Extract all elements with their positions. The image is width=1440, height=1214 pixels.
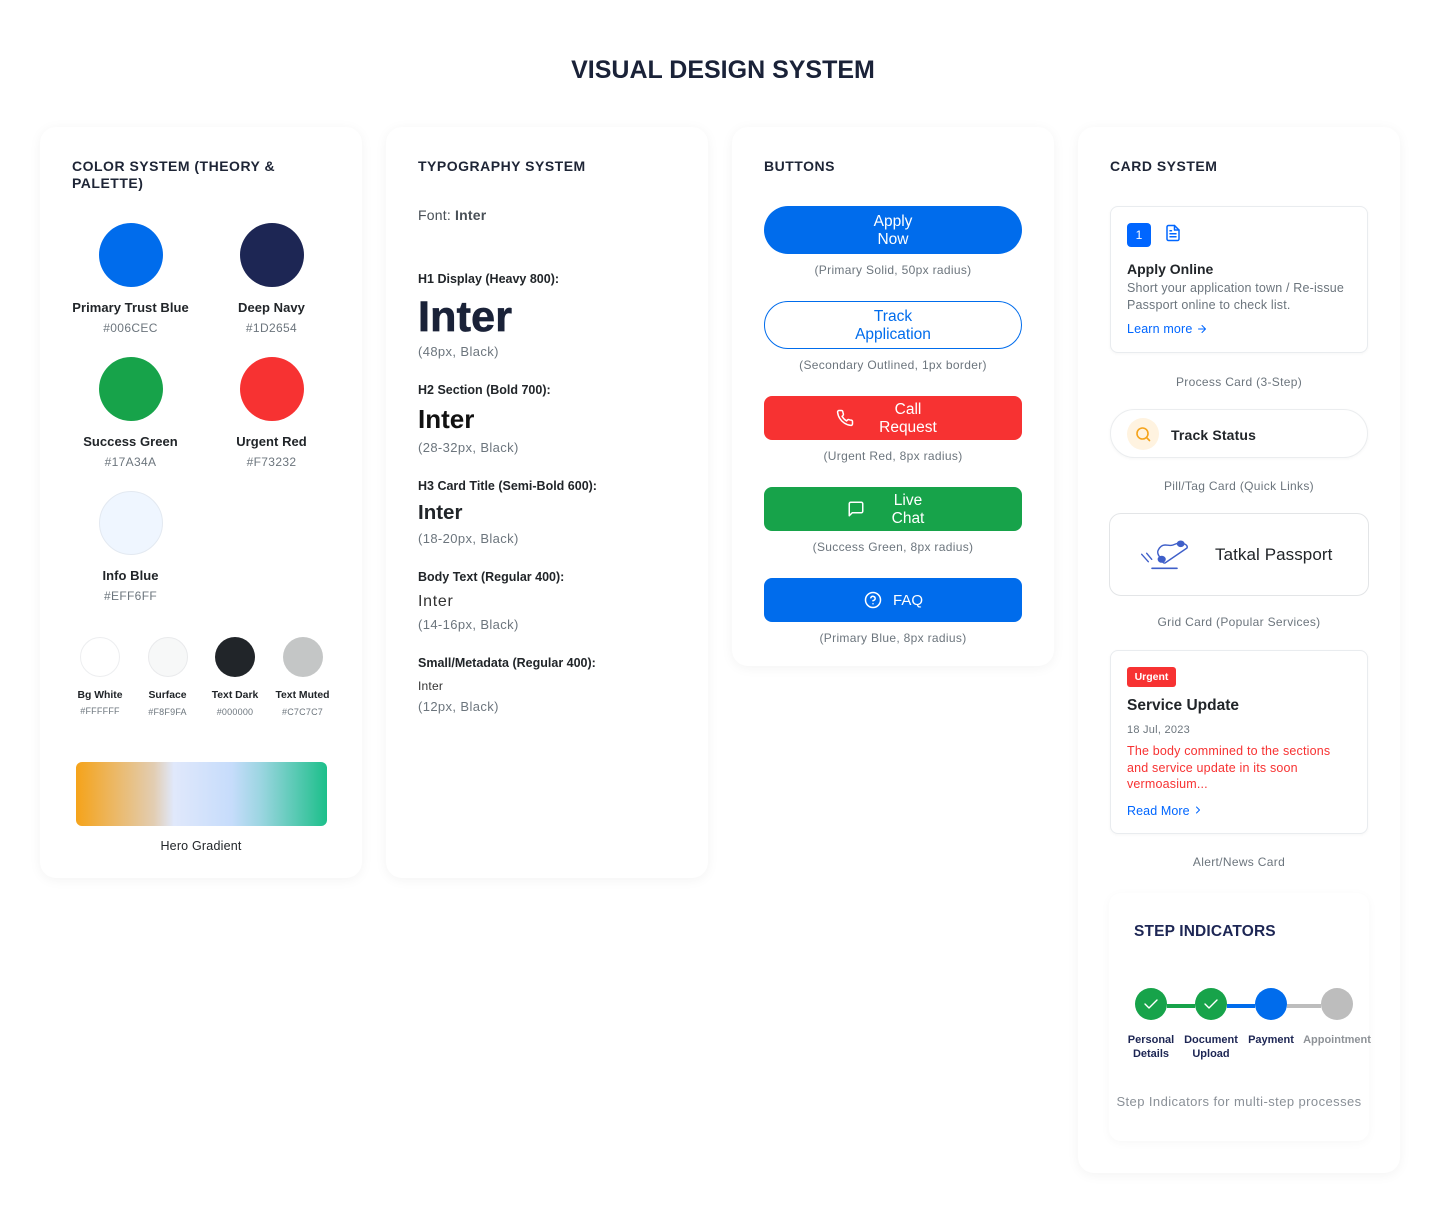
panel: typography system bbox=[386, 127, 708, 878]
card description: Short your application town / Re-issue bbox=[1127, 281, 1344, 295]
pill label: Track Status bbox=[1171, 427, 1256, 443]
swatch: bg white bbox=[77, 637, 123, 716]
swatch: bg white: #FFFFFF bbox=[80, 706, 120, 716]
caption: grid card: Grid Card (Popular Services) bbox=[1157, 615, 1320, 629]
sample: body text bbox=[418, 570, 564, 632]
swatch: surface: Surface bbox=[148, 690, 187, 701]
sample: small metadata bbox=[418, 656, 596, 714]
swatch: info blue: Info Blue bbox=[102, 568, 159, 583]
card description: Passport online to check list. bbox=[1127, 298, 1291, 312]
swatch: text muted: #C7C7C7 bbox=[282, 707, 323, 717]
sample: small metadata: (12px, Black) bbox=[418, 699, 499, 714]
step label: payment: Payment bbox=[1248, 1034, 1294, 1046]
button: live chat: Live bbox=[894, 492, 922, 509]
button: track application: Track bbox=[874, 308, 912, 325]
button: apply now: Now bbox=[877, 230, 908, 248]
step label: personal details: Personal bbox=[1128, 1034, 1174, 1046]
swatch: surface: #F8F9FA bbox=[148, 707, 187, 717]
sample: h3 card title bbox=[418, 479, 597, 546]
button: apply now: Apply bbox=[874, 213, 912, 230]
sample: body text: (14-16px, Black) bbox=[418, 617, 519, 632]
sample: h2 section: Inter bbox=[418, 404, 474, 434]
panel: color system bbox=[40, 127, 362, 878]
link: read more: Read More bbox=[1127, 804, 1190, 818]
pill card bbox=[1110, 409, 1368, 458]
panel: buttons bbox=[732, 127, 1054, 666]
swatch: deep navy bbox=[238, 223, 305, 335]
button: faq: FAQ bbox=[893, 592, 923, 609]
alert body: and service update in its soon bbox=[1127, 760, 1298, 774]
swatch: info blue: #EFF6FF bbox=[104, 589, 157, 603]
panel: card system bbox=[1078, 127, 1400, 1173]
step badge: 1 bbox=[1136, 228, 1142, 242]
heading: typography system: TYPOGRAPHY SYSTEM bbox=[418, 158, 586, 174]
card description bbox=[1127, 281, 1344, 312]
swatch: urgent red: #F73232 bbox=[247, 455, 296, 469]
sample: h2 section: H2 Section (Bold 700): bbox=[418, 383, 551, 397]
sample: h1 display: Inter bbox=[418, 293, 512, 341]
caption: process card: Process Card (3-Step) bbox=[1176, 375, 1302, 389]
grid card bbox=[1109, 513, 1369, 596]
heading: color system: PALETTE) bbox=[72, 175, 143, 191]
button: call request: Call bbox=[895, 401, 921, 418]
swatch: deep navy: Deep Navy bbox=[238, 300, 305, 315]
sample: h2 section bbox=[418, 383, 551, 455]
swatch: success green: Success Green bbox=[83, 434, 178, 449]
step 2 circle bbox=[1195, 988, 1227, 1020]
swatch: primary trust blue: #006CEC bbox=[103, 321, 158, 335]
icon: chevron bbox=[1196, 806, 1200, 814]
sample: body text: Inter bbox=[418, 593, 454, 610]
swatch: text muted bbox=[275, 637, 330, 717]
step label: personal details: Details bbox=[1133, 1048, 1169, 1060]
sample: h1 display bbox=[418, 272, 559, 359]
badge: urgent: Urgent bbox=[1135, 671, 1168, 683]
swatch: text dark: #000000 bbox=[217, 707, 253, 717]
icon: document bbox=[1166, 224, 1180, 242]
icon: question circle bbox=[864, 592, 882, 608]
step label: appointment: Appointment bbox=[1303, 1034, 1371, 1046]
step label: document upload: Document bbox=[1184, 1034, 1238, 1046]
button: call request: Request bbox=[879, 419, 937, 436]
caption: urgent red: (Urgent Red, 8px radius) bbox=[823, 449, 963, 463]
icon: service illustration bbox=[1141, 540, 1188, 570]
heading: color system bbox=[72, 158, 275, 191]
title: VISUAL DESIGN SYSTEM bbox=[571, 56, 875, 84]
sample: small metadata: Inter bbox=[418, 679, 443, 693]
swatch: urgent red bbox=[236, 357, 307, 469]
sample: h3 card title: Inter bbox=[418, 501, 462, 524]
swatch: bg white: Bg White bbox=[77, 690, 123, 701]
step label: document upload: Upload bbox=[1192, 1048, 1230, 1060]
caption: primary blue: (Primary Blue, 8px radius) bbox=[819, 631, 967, 645]
card title: Apply Online bbox=[1127, 261, 1213, 277]
alert body: The body commined to the sections bbox=[1127, 744, 1330, 758]
step 1 circle bbox=[1135, 988, 1167, 1020]
sample: h2 section: (28-32px, Black) bbox=[418, 440, 519, 455]
step badge bbox=[1127, 223, 1151, 247]
connector: green bbox=[1167, 1004, 1195, 1008]
grid card label: Tatkal Passport bbox=[1215, 545, 1332, 564]
caption: secondary outlined: (Secondary Outlined, 1px border) bbox=[799, 358, 987, 372]
swatch: success green bbox=[83, 357, 178, 469]
heading: card system: CARD SYSTEM bbox=[1110, 158, 1217, 174]
alert date: 18 Jul, 2023 bbox=[1127, 724, 1190, 736]
connector: blue bbox=[1227, 1004, 1255, 1008]
connector: grey bbox=[1287, 1004, 1321, 1008]
icon: search in orange circle bbox=[1127, 418, 1159, 450]
button: live chat: Chat bbox=[892, 510, 924, 527]
icon: arrow bbox=[1198, 325, 1206, 333]
sample: h3 card title: (18-20px, Black) bbox=[418, 531, 519, 546]
alert title: Service Update bbox=[1127, 697, 1239, 714]
step label: document upload bbox=[1184, 1034, 1238, 1060]
swatch: info blue bbox=[99, 491, 163, 603]
swatch: surface bbox=[148, 637, 188, 717]
alert body: vermoasium... bbox=[1127, 777, 1208, 791]
hero gradient bar bbox=[76, 762, 326, 826]
swatch: deep navy: #1D2654 bbox=[246, 321, 297, 335]
icon: chat bubble bbox=[848, 502, 864, 516]
button: call request bbox=[764, 396, 1022, 440]
step 4 circle bbox=[1321, 988, 1353, 1020]
swatch: urgent red: Urgent Red bbox=[236, 434, 307, 449]
panel: step indicators bbox=[1109, 893, 1369, 1141]
icon: phone bbox=[836, 410, 854, 426]
alert card bbox=[1110, 650, 1368, 834]
caption: alert card: Alert/News Card bbox=[1193, 855, 1285, 869]
caption: success green: (Success Green, 8px radius) bbox=[813, 540, 973, 554]
sample: small metadata: Small/Metadata (Regular 400): bbox=[418, 656, 596, 670]
heading: step indicators: STEP INDICATORS bbox=[1134, 923, 1276, 940]
button: track application: Application bbox=[855, 326, 931, 343]
step 3 circle bbox=[1255, 988, 1287, 1020]
sample: h3 card title: H3 Card Title (Semi-Bold 600): bbox=[418, 479, 597, 493]
sample: h1 display: H1 Display (Heavy 800): bbox=[418, 272, 559, 286]
swatch: text muted: Text Muted bbox=[275, 690, 330, 701]
heading: color system: COLOR SYSTEM (THEORY & bbox=[72, 158, 275, 174]
sample: body text: Body Text (Regular 400): bbox=[418, 570, 564, 584]
swatch: primary trust blue: Primary Trust Blue bbox=[72, 300, 189, 315]
process card bbox=[1110, 206, 1368, 353]
sample: h1 display: (48px, Black) bbox=[418, 344, 499, 359]
button: track application bbox=[764, 301, 1022, 349]
button: apply now bbox=[764, 206, 1022, 254]
swatch: text dark bbox=[212, 637, 258, 717]
swatch: primary trust blue bbox=[72, 223, 189, 335]
swatch: success green: #17A34A bbox=[105, 455, 156, 469]
link: learn more: Learn more bbox=[1127, 322, 1192, 336]
label: hero gradient: Hero Gradient bbox=[160, 839, 242, 853]
button: live chat bbox=[764, 487, 1022, 531]
alert body bbox=[1127, 744, 1330, 791]
swatch: text dark: Text Dark bbox=[212, 690, 258, 701]
font note: Font: Inter bbox=[418, 207, 486, 223]
caption: step indicators: Step Indicators for multi-step processes bbox=[1116, 1094, 1362, 1109]
caption: pill card: Pill/Tag Card (Quick Links) bbox=[1164, 479, 1314, 493]
heading: buttons: BUTTONS bbox=[764, 158, 835, 174]
button: faq bbox=[764, 578, 1022, 622]
badge: urgent bbox=[1127, 667, 1176, 687]
step label: personal details bbox=[1128, 1034, 1174, 1060]
caption: primary solid: (Primary Solid, 50px radius) bbox=[814, 263, 972, 277]
